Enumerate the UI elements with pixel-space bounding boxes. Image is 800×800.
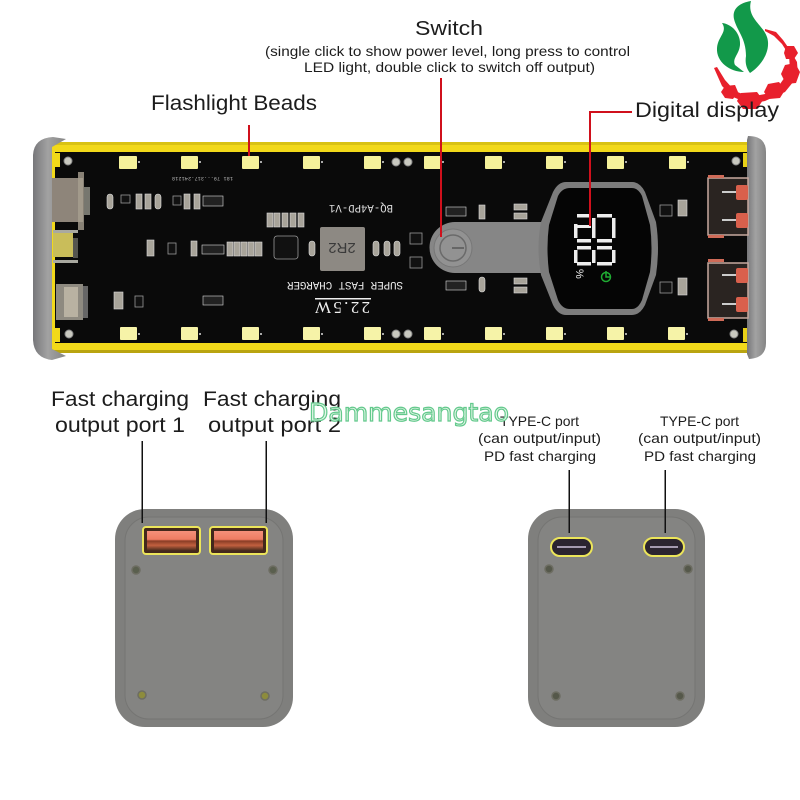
- label: output port 1: Fast charging: [51, 387, 189, 411]
- label: output port 1: output port 1: [55, 413, 185, 437]
- pcb silkscreen text: SUPER FAST CHARGER: [287, 278, 403, 290]
- watermark: Dammesangtao: [309, 398, 509, 427]
- label: Type-C port 1: TYPE-C port: [500, 413, 579, 429]
- callout: switch: LED light, double click to switch off output): [304, 59, 595, 75]
- right end cap: [747, 136, 766, 359]
- port 1: [143, 527, 200, 554]
- percent sign: %: [573, 269, 585, 279]
- label: output port 1: [51, 387, 189, 523]
- type-c port 1: [551, 538, 592, 556]
- yellow housing: [48, 142, 750, 353]
- panel: Type-C end: [528, 509, 705, 727]
- green power icon: [602, 271, 610, 282]
- red gear arc: [714, 29, 800, 109]
- callout: switch: (single click to show power level, long press to control: [265, 43, 630, 59]
- label: Type-C port 1: (can output/input): [478, 430, 601, 446]
- flashlight LED beads top row: [119, 156, 686, 169]
- LED contact dots: [138, 161, 689, 335]
- left end cap: [33, 137, 66, 360]
- label: Type-C port 2: (can output/input): [638, 430, 761, 446]
- black PCB: [55, 152, 747, 343]
- digital display: [538, 182, 658, 315]
- label: Type-C port 1: PD fast charging: [484, 448, 596, 464]
- label: Type-C port 2: PD fast charging: [644, 448, 756, 464]
- panel: USB output end: [115, 509, 293, 727]
- screws: [545, 565, 692, 700]
- label: Type-C port 1: [478, 413, 601, 533]
- solder pads: [64, 157, 740, 338]
- left side ports: [52, 172, 90, 320]
- pcb silkscreen text: 22.5W: [314, 298, 370, 317]
- screws: [132, 566, 277, 700]
- port 2: [210, 527, 267, 554]
- switch button with slider: [430, 222, 545, 273]
- label: Type-C port 2: [638, 413, 761, 533]
- callout: flashlight beads: Flashlight Beads: [151, 92, 317, 115]
- label: Type-C port 2: TYPE-C port: [660, 413, 739, 429]
- type-c port 2: [644, 538, 684, 556]
- label: output port 2: [203, 387, 341, 523]
- logo: flame and gear: [714, 1, 800, 109]
- display digits: [574, 214, 616, 266]
- power bank circuit board: [33, 136, 766, 360]
- flashlight LED beads bottom row: [120, 327, 685, 340]
- callout: switch: [265, 17, 630, 237]
- label: output port 2: Fast charging: [203, 387, 341, 411]
- callout: switch: Switch: [415, 17, 483, 40]
- inductor 2R2: 2R2: [328, 239, 356, 256]
- callout: digital display: Digital display: [635, 99, 780, 122]
- chips: [121, 195, 672, 307]
- right USB ports: [708, 175, 748, 321]
- green flames: [734, 1, 768, 73]
- callout: digital display: [590, 99, 780, 226]
- label: output port 2: output port 2: [208, 413, 341, 437]
- inductor 2R2: [320, 227, 365, 271]
- pcb silkscreen text: 181 79...317.241218: [172, 175, 233, 181]
- small PCB components: [107, 194, 687, 309]
- pcb silkscreen text: [172, 175, 403, 317]
- pcb silkscreen text: BQ-A4PD-V1: [329, 201, 393, 213]
